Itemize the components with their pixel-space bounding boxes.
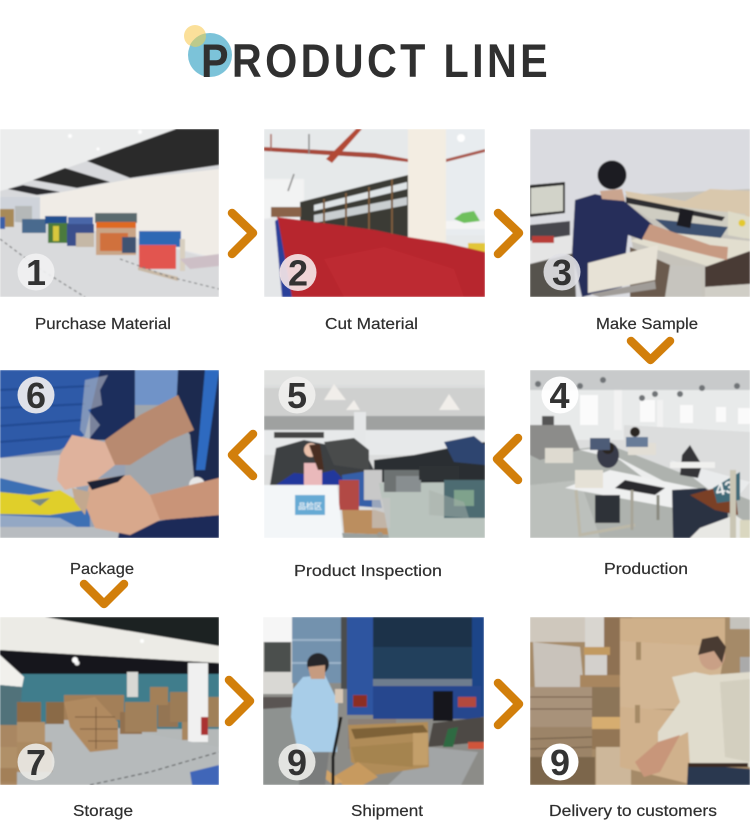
step 9: delivery to customers <box>530 617 750 820</box>
caption: Shipment <box>351 803 424 820</box>
photo: truck loading <box>263 617 484 785</box>
badge: number 1: 1 <box>26 252 46 293</box>
arrow: step 5 to 6 <box>232 434 253 476</box>
photo: hands packaging <box>0 370 219 538</box>
step 3: make sample <box>530 129 750 333</box>
photo: inspection area: 品检区 <box>298 501 322 511</box>
arrow: step 3 down to 4 <box>631 341 670 360</box>
photo: sewing workshop <box>530 370 750 538</box>
badge: number 3 <box>544 252 580 293</box>
step 7: storage <box>0 617 219 820</box>
photo: cutting table with red fabric <box>264 129 485 297</box>
caption: Production <box>604 561 688 578</box>
badge: number 2: 2 <box>288 252 308 294</box>
caption: Package <box>70 561 134 578</box>
photo: sewing workshop: 43 <box>714 477 736 500</box>
badge: number 7: 7 <box>26 742 46 783</box>
title <box>184 25 548 88</box>
heading text: PRODUCT LINE <box>201 36 548 88</box>
photo: operator at plotter <box>530 129 750 297</box>
badge: number 3: 3 <box>552 252 572 293</box>
icon: yellow circle <box>184 25 206 47</box>
badge: number 1 <box>18 252 54 293</box>
badge: number 9: 9 <box>287 742 307 783</box>
badge: number 9 <box>542 742 578 783</box>
arrow: step 4 to 5 <box>497 438 518 480</box>
badge: number 9: 9 <box>550 742 570 783</box>
photo: man carrying boxes <box>530 617 750 785</box>
circle overlap <box>190 33 206 47</box>
badge: number 6: 6 <box>26 375 46 416</box>
photo: material warehouse <box>0 129 219 297</box>
badge: number 4 <box>542 375 578 416</box>
step 1: purchase material <box>0 129 219 333</box>
step 2: cut material <box>264 129 485 333</box>
arrow: step 1 to 2 <box>232 213 253 254</box>
step 8: shipment <box>263 617 484 820</box>
caption: Purchase Material <box>35 316 171 333</box>
step 4: production <box>530 370 750 578</box>
arrow: step 2 to 3 <box>498 213 519 254</box>
arrow: step 7 to 8 <box>229 680 250 722</box>
arrow: step 8 to 9 <box>498 683 519 725</box>
photo: inspection area <box>264 370 485 538</box>
badge: number 2 <box>280 252 316 294</box>
caption: Product Inspection <box>294 563 442 580</box>
arrow: step 6 down to 7 <box>84 584 124 604</box>
icon: blue circle <box>188 33 232 77</box>
photo: storage warehouse <box>0 617 219 785</box>
badge: number 4: 4 <box>549 375 570 416</box>
badge: number 6 <box>18 375 54 416</box>
caption: Delivery to customers <box>549 803 717 820</box>
step 6: package <box>0 370 219 578</box>
badge: number 9 <box>278 742 316 783</box>
caption: Make Sample <box>596 316 698 333</box>
caption: Cut Material <box>325 316 418 333</box>
badge: number 5: 5 <box>287 375 307 416</box>
caption: Storage <box>73 803 133 820</box>
badge: number 5 <box>278 375 316 416</box>
badge: number 7 <box>18 742 54 783</box>
step 5: product inspection <box>264 370 485 580</box>
